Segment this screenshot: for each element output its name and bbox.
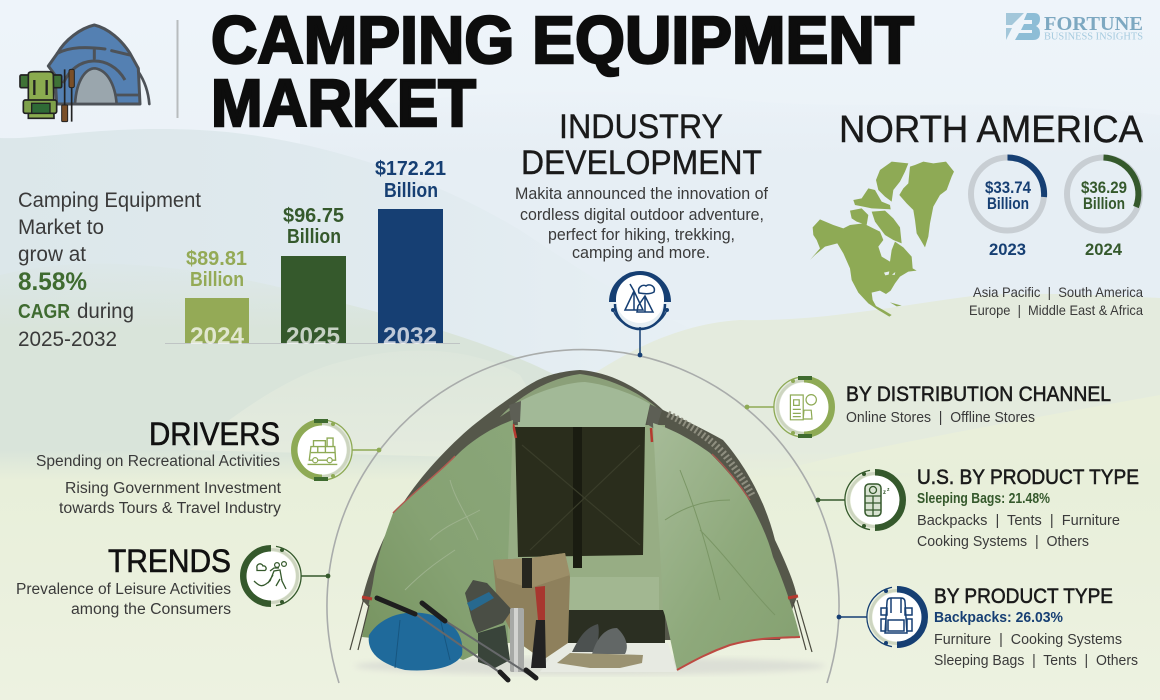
- icon: tent with backpack and poles: [20, 25, 149, 122]
- panel: by product type: BY PRODUCT TYPE: [934, 585, 1113, 608]
- donut 2024: 2024: [1085, 240, 1123, 259]
- title: [211, 3, 914, 141]
- donut 2024: [1067, 158, 1140, 259]
- tent floor: [567, 577, 659, 610]
- tent outer shell: [362, 370, 797, 640]
- panel: by distribution channel: [846, 383, 1111, 426]
- logo mark: [1006, 13, 1040, 40]
- donut 2024: $36.29: [1081, 179, 1127, 197]
- dark kit under hat: [478, 625, 510, 668]
- bar 2025: $96.75: [283, 205, 344, 227]
- bar 2025: Billion: [287, 226, 341, 248]
- donut 2023: $33.74: [985, 179, 1032, 197]
- bar 2024: [185, 248, 249, 350]
- axe: [535, 586, 545, 620]
- bar 2032: [375, 158, 446, 350]
- panel: U.S. by product type: Cooking Systems | Others: [917, 533, 1089, 550]
- panel: industry development: [515, 108, 768, 262]
- sleeping bag: [369, 612, 462, 670]
- other regions: Asia Pacific | South America: [973, 284, 1143, 300]
- panel: by product type: Backpacks: 26.03%: [934, 610, 1063, 626]
- text block: CAGR: grow at: [18, 243, 86, 266]
- backpack: [493, 553, 570, 660]
- ground shadow: [355, 657, 825, 675]
- logo: Fortune Business Insights: [1006, 13, 1143, 42]
- tent inner wall: [505, 425, 665, 643]
- logo: Fortune Business Insights: BUSINESS INSIGHTS: [1044, 32, 1143, 42]
- panel: U.S. by product type: Backpacks | Tents | Furniture: [917, 512, 1120, 529]
- text block: CAGR: Camping Equipment: [18, 189, 201, 212]
- tent left panel: [362, 420, 513, 660]
- panel: by product type: [934, 585, 1138, 669]
- bar 2032: Billion: [384, 180, 438, 202]
- tent roof stripes: [668, 414, 752, 495]
- tent guy lines: [350, 598, 812, 652]
- tent door mesh: [515, 427, 645, 557]
- bar 2025: 2025: [286, 323, 340, 350]
- text block: CAGR: 2025-2032: [18, 328, 117, 351]
- tent body: [48, 25, 140, 104]
- text block: CAGR: CAGR: [18, 301, 70, 323]
- donut 2023: 2023: [989, 240, 1026, 259]
- arc around tent: [327, 350, 839, 683]
- icon: sleeping bag: z: [883, 490, 886, 496]
- panel: U.S. by product type: [917, 466, 1139, 550]
- ground in tent entrance: [540, 643, 677, 672]
- panel: U.S. by product type: U.S. BY PRODUCT TYPE: [917, 466, 1139, 489]
- panel: drivers: DRIVERS: [149, 416, 280, 452]
- thermos: [510, 608, 524, 672]
- panel: by product type: Furniture | Cooking Systems: [934, 631, 1122, 648]
- title: CAMPING EQUIPMENT: [211, 3, 914, 78]
- icon: drivers: [295, 420, 381, 480]
- heading: [521, 108, 762, 182]
- body text: cordless digital outdoor adventure,: [520, 206, 764, 224]
- panel: drivers: [36, 416, 282, 517]
- panel: trends: among the Consumers: [71, 601, 231, 618]
- trekking poles: [417, 615, 530, 676]
- bar chart: market size: [165, 158, 460, 350]
- icon: backpack: [837, 587, 924, 647]
- panel: North America: [810, 109, 1144, 318]
- panel: by distribution channel: BY DISTRIBUTION CHANNEL: [846, 383, 1111, 406]
- bar 2032: $172.21: [375, 158, 446, 180]
- heading: INDUSTRY: [559, 108, 723, 146]
- body text: [515, 185, 768, 262]
- body text: Makita announced the innovation of: [515, 185, 768, 203]
- panel: by product type: Sleeping Bags | Tents | Others: [934, 652, 1138, 669]
- icon: sleeping bag: z: [887, 487, 890, 493]
- logo: Fortune Business Insights: FORTUNE: [1044, 13, 1143, 35]
- folded cloth: [557, 653, 643, 668]
- hero image: camping tent with gear: [350, 370, 825, 680]
- bar 2024: $89.81: [186, 248, 247, 270]
- panel: U.S. by product type: Sleeping Bags: 21.48%: [917, 491, 1050, 507]
- icon: distribution channel: [745, 377, 831, 437]
- bar 2024: Billion: [190, 269, 244, 291]
- heading: NORTH AMERICA: [839, 109, 1144, 151]
- donut 2023: Billion: [987, 195, 1029, 213]
- shoes: [572, 624, 599, 652]
- body text: perfect for hiking, trekking,: [548, 226, 735, 244]
- panel: drivers: Rising Government Investment: [65, 480, 282, 497]
- donut 2023: [971, 157, 1044, 259]
- text block: CAGR: [18, 189, 201, 351]
- tent upper layer: [500, 374, 662, 417]
- bar 2025: [281, 205, 346, 350]
- donut 2024: Billion: [1083, 195, 1125, 213]
- tent right flap: [653, 423, 800, 670]
- title: MARKET: [211, 66, 476, 141]
- panel: trends: TRENDS: [108, 543, 231, 579]
- icon: industry development: [611, 275, 669, 357]
- map: North America: [810, 162, 954, 317]
- panel: drivers: towards Tours & Travel Industry: [59, 500, 281, 517]
- panel: trends: [16, 543, 231, 618]
- body text: camping and more.: [572, 244, 710, 262]
- text block: CAGR: 8.58%: [18, 268, 87, 296]
- text block: CAGR: during: [77, 300, 134, 323]
- bar 2032: 2032: [383, 323, 437, 350]
- bar 2024: 2024: [190, 323, 245, 350]
- heading: DEVELOPMENT: [521, 144, 762, 182]
- icon: sleeping bag: [816, 470, 902, 530]
- panel: trends: Prevalence of Leisure Activities: [16, 581, 231, 598]
- great lakes: [884, 271, 895, 275]
- panel: drivers: Spending on Recreational Activities: [36, 453, 280, 470]
- backpack: [20, 75, 62, 88]
- beanie hat: [465, 580, 512, 633]
- text block: CAGR: Market to: [18, 216, 104, 239]
- divider: [176, 20, 178, 118]
- tent awning: [517, 382, 650, 427]
- icon: trends: [244, 546, 330, 606]
- trekking poles: [65, 69, 72, 122]
- panel: by distribution channel: Online Stores | Offline Stores: [846, 409, 1035, 426]
- other regions: Europe | Middle East & Africa: [969, 302, 1143, 318]
- other regions: [969, 284, 1143, 318]
